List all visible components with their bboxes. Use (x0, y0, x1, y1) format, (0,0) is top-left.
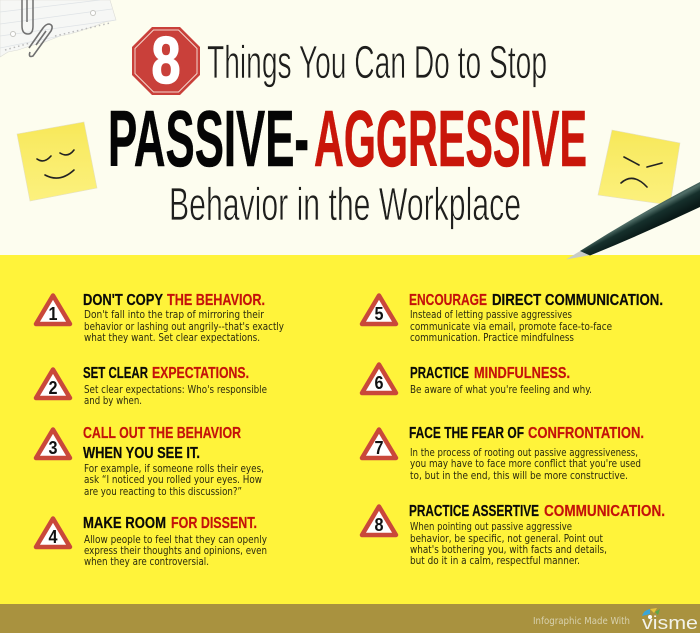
tip 2: EXPECTATIONS. (152, 365, 249, 382)
tip 4: 4 (48, 527, 58, 547)
sticky note: smiling face (17, 122, 97, 201)
tip 8: When pointing out passive aggressive (410, 521, 572, 533)
tip 7: CONFRONTATION. (528, 425, 644, 442)
tip 5 (362, 292, 663, 344)
tip 5: ENCOURAGE (409, 292, 487, 309)
tip 4: MAKE ROOM (83, 515, 166, 532)
tip 6: MINDFULNESS. (474, 365, 570, 382)
tip 4 (36, 515, 267, 568)
icon: stop sign with number 8: 8 (152, 23, 180, 97)
tip 7: FACE THE FEAR OF (409, 425, 524, 442)
sticky note: angry face (598, 130, 680, 205)
tip 8: COMMUNICATION. (544, 503, 665, 520)
footer credit: Infographic Made With (533, 616, 630, 627)
header background (0, 0, 700, 255)
tip 7 (362, 425, 644, 482)
tip 3: are you reacting to this discussion?” (84, 486, 242, 498)
tip 2: SET CLEAR (83, 365, 148, 382)
tip 7: to, but in the end, this will be more constructive. (410, 470, 628, 482)
tip 7: In the process of rooting out passive aggressiveness, (410, 447, 638, 459)
tip 8: but do it in a calm, respectful manner. (410, 555, 580, 567)
tip 7: you may have to face more conflict that you're used (410, 458, 641, 470)
tip 5: communicate via email, promote face-to-face (410, 321, 612, 333)
tip 3: ask “I noticed you rolled your eyes. How (84, 474, 262, 486)
tip 3 (36, 425, 264, 498)
tip 4: FOR DISSENT. (171, 515, 257, 532)
tip 4: Allow people to feel that they can openly (84, 534, 267, 546)
footer bar (0, 604, 700, 633)
notebook paper with paper clips (0, 0, 116, 57)
tip 3: WHEN YOU SEE IT. (83, 445, 200, 462)
tip 1: behavior or lashing out angrily--that's exactly (84, 321, 284, 333)
tip 4: express their thoughts and opinions, even (84, 545, 267, 557)
icon: visme logo (642, 608, 698, 633)
tip 7: 7 (374, 438, 384, 458)
tip 1 (36, 292, 284, 344)
tip 2: 2 (48, 378, 58, 398)
tip 2 (36, 365, 267, 407)
yellow content panel (0, 255, 700, 604)
tip 2: Set clear expectations: Who's responsible (84, 384, 267, 396)
tip 1: THE BEHAVIOR. (167, 292, 265, 309)
tip 8: what's bothering you, with facts and details, (410, 544, 607, 556)
tip 1: what they want. Set clear expectations. (84, 332, 260, 344)
tip 1: Don't fall into the trap of mirroring their (84, 309, 265, 321)
icon: stop sign with number 8 (132, 23, 200, 97)
title line 2: PASSIVE- (108, 94, 309, 183)
tip 3: 3 (48, 438, 58, 458)
tip 6: PRACTICE (410, 365, 469, 382)
tip 4: when they are controversial. (84, 556, 209, 568)
icon: visme logo: visme (642, 613, 698, 633)
icon: pen (566, 182, 700, 260)
tip 5: Instead of letting passive aggressives (410, 309, 572, 321)
tip 2: and by when. (84, 395, 142, 407)
title line 3: Behavior in the Workplace (169, 178, 521, 230)
tip 8: 8 (374, 515, 384, 535)
tip 5: 5 (374, 304, 384, 324)
tip 5: DIRECT COMMUNICATION. (492, 292, 663, 309)
tip 3: CALL OUT THE BEHAVIOR (83, 425, 241, 442)
tip 8: behavior, be specific, not general. Point out (410, 533, 603, 545)
tip 8: PRACTICE ASSERTIVE (409, 503, 539, 520)
tip 6: 6 (374, 373, 384, 393)
tip 3: For example, if someone rolls their eyes, (84, 463, 264, 475)
tip 5: communication. Practice mindfulness (410, 332, 574, 344)
tip 6: Be aware of what you're feeling and why. (410, 384, 592, 396)
tip 8 (362, 503, 665, 567)
tip 6 (362, 364, 592, 396)
tip 1: 1 (48, 304, 58, 324)
tip 1: DON'T COPY (83, 292, 163, 309)
